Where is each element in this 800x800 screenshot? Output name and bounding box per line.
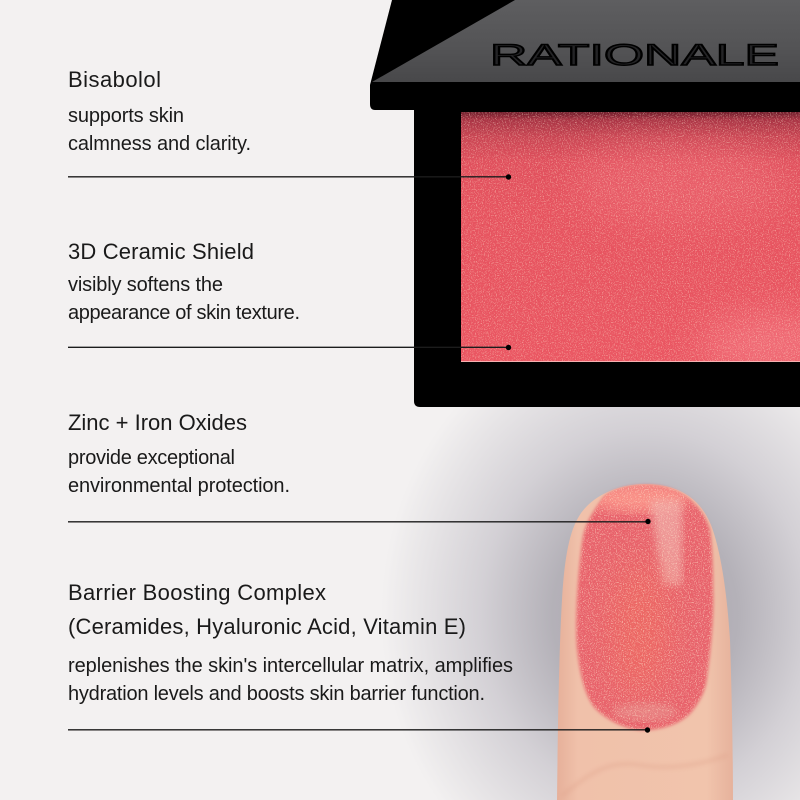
callout: Barrier Boosting Complex	[68, 580, 650, 733]
description: provide exceptional	[68, 447, 235, 469]
finger	[557, 484, 733, 800]
callout: Bisabolol: calmness and clarity.	[68, 133, 251, 155]
description: supports skin	[68, 105, 184, 127]
callout: 3D Ceramic Shield	[68, 239, 511, 350]
logo: RATIONALE: RATIONALE	[490, 39, 779, 72]
compact lid	[370, 0, 800, 110]
leader line	[68, 346, 508, 348]
finger crease	[562, 755, 728, 796]
swatch	[570, 480, 720, 735]
heading: Bisabolol	[68, 67, 161, 92]
description: replenishes the skin's intercellular matrix, amplifies	[68, 655, 513, 677]
compact product	[370, 0, 800, 407]
callout: 3D Ceramic Shield: appearance of skin texture.	[68, 302, 300, 324]
heading: Barrier Boosting Complex	[68, 580, 326, 605]
finger shadow	[270, 400, 800, 800]
leader line	[68, 729, 647, 731]
finger with swatch	[557, 480, 733, 800]
blush pan	[461, 112, 800, 375]
callout: Barrier Boosting Complex: (Ceramides, Hyaluronic Acid, Vitamin E)	[68, 614, 466, 639]
heading: Zinc + Iron Oxides	[68, 410, 247, 435]
description: visibly softens the	[68, 274, 223, 296]
heading: 3D Ceramic Shield	[68, 239, 254, 264]
leader line	[68, 521, 648, 523]
callout: Barrier Boosting Complex: hydration levels and boosts skin barrier function.	[68, 683, 485, 705]
callout: Zinc + Iron Oxides: environmental protection.	[68, 475, 290, 497]
leader line	[68, 176, 508, 178]
compact base	[414, 108, 800, 407]
callout: Bisabolol	[68, 67, 511, 180]
callout: Zinc + Iron Oxides	[68, 410, 651, 524]
